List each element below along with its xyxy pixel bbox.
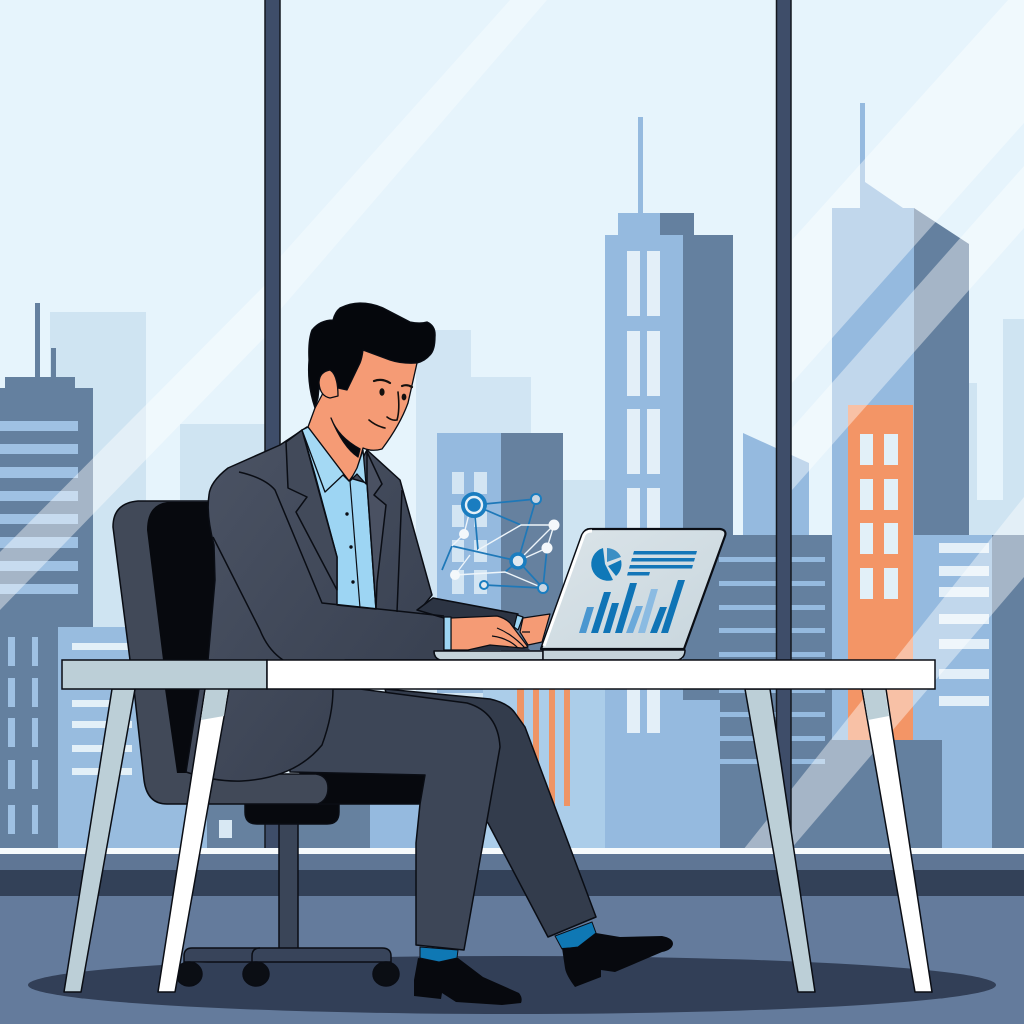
near trouser leg bbox=[290, 689, 500, 950]
window frame mullions bbox=[265, 0, 791, 850]
chin shadow bbox=[331, 418, 360, 457]
desk top bbox=[62, 660, 935, 689]
face features bbox=[369, 380, 412, 428]
right lapel bbox=[367, 452, 386, 609]
orange building bbox=[848, 405, 913, 740]
bar chart bbox=[579, 580, 685, 633]
report text lines bbox=[627, 551, 697, 576]
window sill and floor bbox=[0, 848, 1024, 1024]
left lapel bbox=[286, 430, 337, 590]
collar bbox=[302, 427, 349, 492]
far trouser leg bbox=[385, 689, 596, 937]
far sleeve bbox=[417, 598, 518, 627]
socks bbox=[420, 922, 596, 962]
face and neck skin bbox=[308, 345, 417, 481]
hair bbox=[309, 303, 435, 408]
ear bbox=[319, 370, 338, 398]
floor shadow bbox=[28, 956, 996, 1014]
desk legs bbox=[64, 689, 932, 992]
data network graphic bbox=[442, 494, 560, 593]
laptop base bbox=[434, 650, 685, 660]
jacket seams bbox=[213, 472, 444, 660]
office chair bbox=[113, 501, 425, 986]
neck and head bbox=[302, 303, 435, 492]
hands on keyboard bbox=[444, 614, 550, 650]
shoes bbox=[414, 933, 673, 1005]
jacket bbox=[186, 427, 518, 781]
pie chart bbox=[591, 548, 621, 581]
laptop screen bbox=[541, 529, 725, 649]
city skyline bbox=[0, 103, 1024, 860]
shirt bbox=[302, 430, 376, 609]
laptop bbox=[434, 529, 725, 660]
